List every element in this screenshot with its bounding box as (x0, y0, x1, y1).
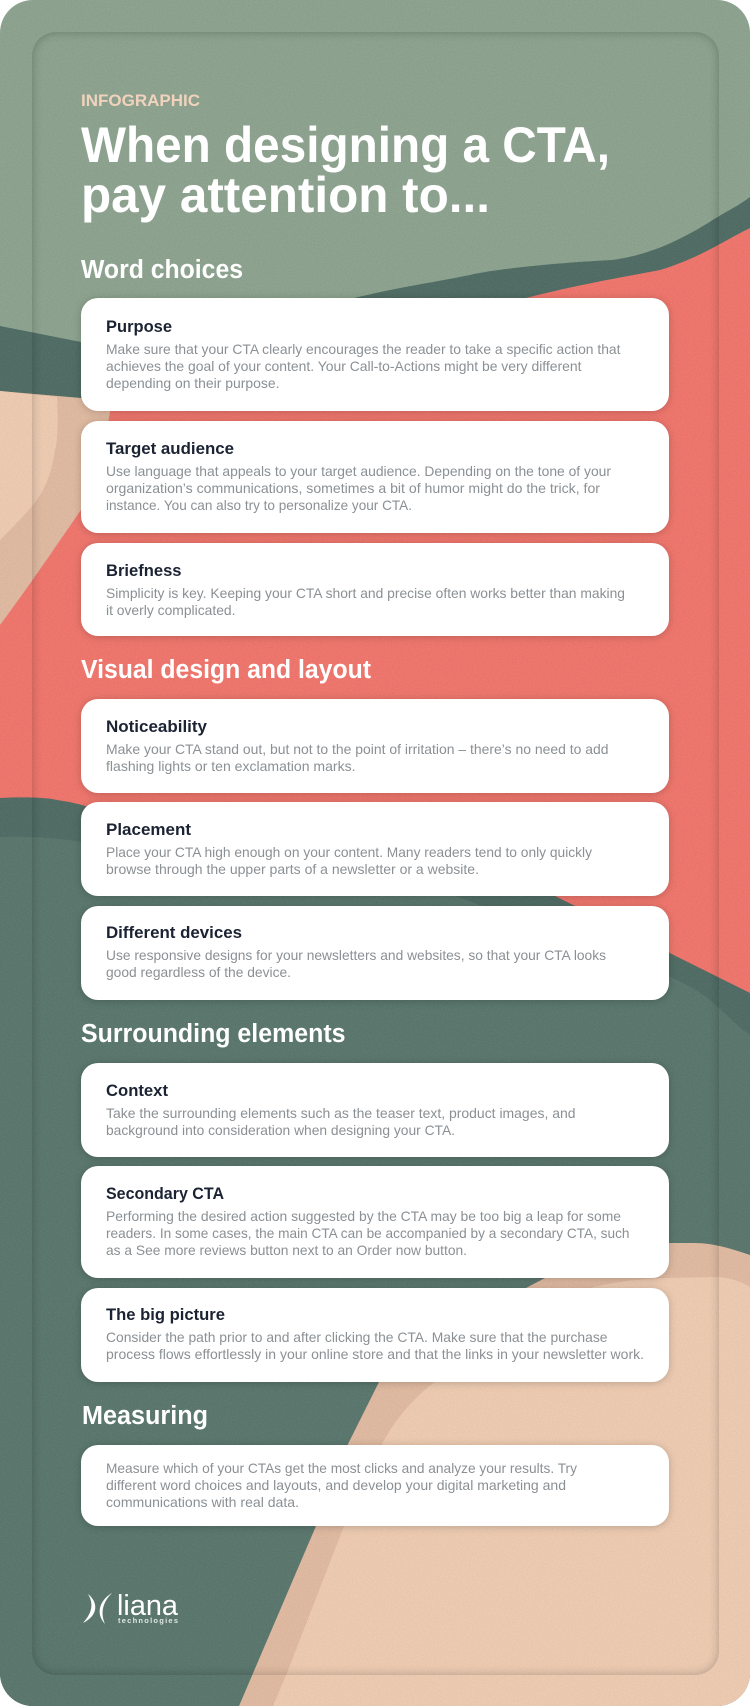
card: placement: Placement (106, 821, 192, 839)
heading: word choices: Word choices (81, 256, 243, 284)
card: different devices (81, 906, 669, 1000)
card: the big picture (81, 1288, 669, 1382)
logo: liana technologies: technologies (118, 1616, 178, 1625)
card: context: Take the surrounding elements such as the teaser text, product images, and (106, 1106, 576, 1121)
title (81, 117, 610, 223)
card: measuring: communications with real data. (106, 1495, 299, 1510)
heading: measuring: Measuring (82, 1402, 208, 1430)
card: target audience: Target audience (106, 440, 234, 458)
card: target audience: organization’s communications, sometimes a bit of humor might do the trick, for (106, 481, 600, 496)
card: measuring (81, 1445, 669, 1526)
card: secondary cta: as a See more reviews button next to an Order now button. (106, 1243, 467, 1258)
medium green lower area (0, 837, 750, 1706)
left dark peach shape (0, 391, 110, 625)
card: placement: browse through the upper parts of a newsletter or a website. (106, 862, 479, 877)
card: purpose (81, 298, 669, 411)
card: measuring: Measure which of your CTAs get the most clicks and analyze your results. Try (106, 1461, 577, 1476)
title: When designing a CTA, (81, 117, 610, 173)
card: target audience: Use language that appeals to your target audience. Depending on the tone of your (106, 464, 611, 479)
heading: visual design and layout: Visual design and layout (81, 656, 371, 684)
card: different devices: Use responsive designs for your newsletters and websites, so that your CTA looks (106, 948, 606, 963)
card: secondary cta: readers. In some cases, the main CTA can be accompanied by a secondary CTA, such (106, 1226, 630, 1241)
card: noticeability: flashing lights or ten exclamation marks. (106, 759, 356, 774)
eyebrow label: INFOGRAPHIC (81, 92, 200, 110)
card: different devices: good regardless of the device. (106, 965, 291, 980)
card: placement: Place your CTA high enough on your content. Many readers tend to only quickly (106, 845, 592, 860)
left light peach shape (0, 391, 58, 540)
card: the big picture: The big picture (106, 1306, 225, 1324)
card: briefness: it overly complicated. (106, 603, 236, 618)
card: context (81, 1063, 669, 1157)
card: purpose: achieves the goal of your content. Your Call-to-Actions might be very different (106, 359, 582, 374)
card: briefness: Briefness (106, 562, 182, 580)
icon: logo arcs (83, 1593, 112, 1624)
card: measuring: different word choices and layouts, and develop your digital marketing and (106, 1478, 566, 1493)
dark green lower band (0, 797, 750, 1706)
logo: liana technologies (83, 1590, 179, 1625)
title: pay attention to... (81, 167, 490, 223)
card: noticeability: Noticeability (106, 718, 208, 736)
card: noticeability: Make your CTA stand out, but not to the point of irritation – there’s no need to add (106, 742, 608, 757)
card: secondary cta: Performing the desired action suggested by the CTA may be too big a leap for some (106, 1209, 621, 1224)
card: context: background into consideration when designing your CTA. (106, 1123, 455, 1138)
card: purpose: depending on their purpose. (106, 376, 280, 391)
coral area (0, 228, 750, 993)
card: secondary cta: Secondary CTA (106, 1185, 224, 1203)
card: the big picture: Consider the path prior to and after clicking the CTA. Make sure that the purchase (106, 1330, 608, 1345)
card: placement (81, 802, 669, 896)
bottom light peach shape (273, 1277, 750, 1706)
card: different devices: Different devices (106, 924, 242, 942)
dark green wave band (0, 197, 750, 398)
card: context: Context (106, 1082, 169, 1100)
heading: surrounding elements: Surrounding elements (81, 1020, 346, 1048)
card: purpose: Make sure that your CTA clearly encourages the reader to take a specific action that (106, 342, 621, 357)
card: briefness: Simplicity is key. Keeping your CTA short and precise often works better than making (106, 586, 625, 601)
card: noticeability (81, 699, 669, 793)
card: the big picture: process flows effortlessly in your online store and that the links in your newsletter work. (106, 1347, 644, 1362)
card: purpose: Purpose (106, 318, 172, 336)
card: target audience: instance. You can also try to personalize your CTA. (106, 498, 412, 513)
card: target audience (81, 421, 669, 533)
bottom dark peach shape (239, 1243, 750, 1706)
card: briefness (81, 543, 669, 636)
card: secondary cta (81, 1166, 669, 1278)
logo: liana technologies: liana (117, 1590, 179, 1622)
